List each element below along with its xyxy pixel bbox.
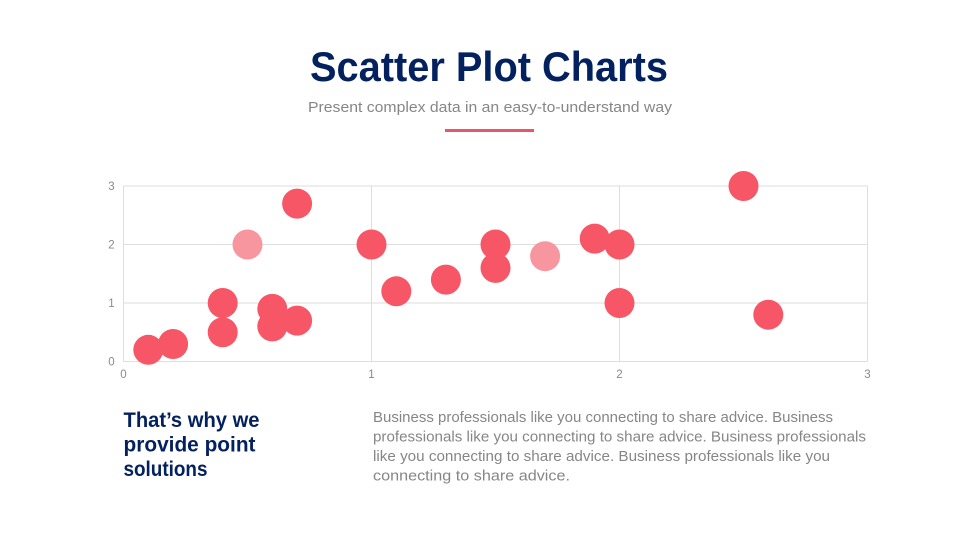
x axis labels: 2 — [616, 369, 623, 381]
subheading: solutions — [124, 458, 208, 481]
x axis labels — [120, 369, 871, 381]
x axis labels: 1 — [368, 369, 375, 381]
scatter chart — [108, 171, 871, 381]
subheading: provide point — [124, 434, 256, 456]
subheading — [124, 409, 260, 481]
body text: connecting to share advice. — [373, 468, 570, 484]
x axis labels: 3 — [864, 369, 871, 381]
y axis labels: 3 — [108, 181, 115, 193]
subtitle: Present complex data in an easy-to-understand way — [308, 99, 673, 116]
subheading: That’s why we — [124, 409, 260, 432]
body text: professionals like you connecting to share advice. Business professionals — [373, 428, 866, 446]
body text — [373, 409, 866, 484]
title: Scatter Plot Charts — [310, 43, 668, 90]
y axis labels — [108, 181, 115, 368]
y axis labels: 0 — [108, 356, 115, 368]
y axis labels: 1 — [108, 298, 115, 310]
data points — [133, 171, 783, 365]
y axis labels: 2 — [108, 240, 115, 252]
body text: Business professionals like you connecting to share advice. Business — [373, 409, 833, 426]
x axis labels: 0 — [120, 369, 127, 381]
body text: like you connecting to share advice. Business professionals like you — [373, 448, 830, 465]
accent underline — [445, 129, 534, 132]
